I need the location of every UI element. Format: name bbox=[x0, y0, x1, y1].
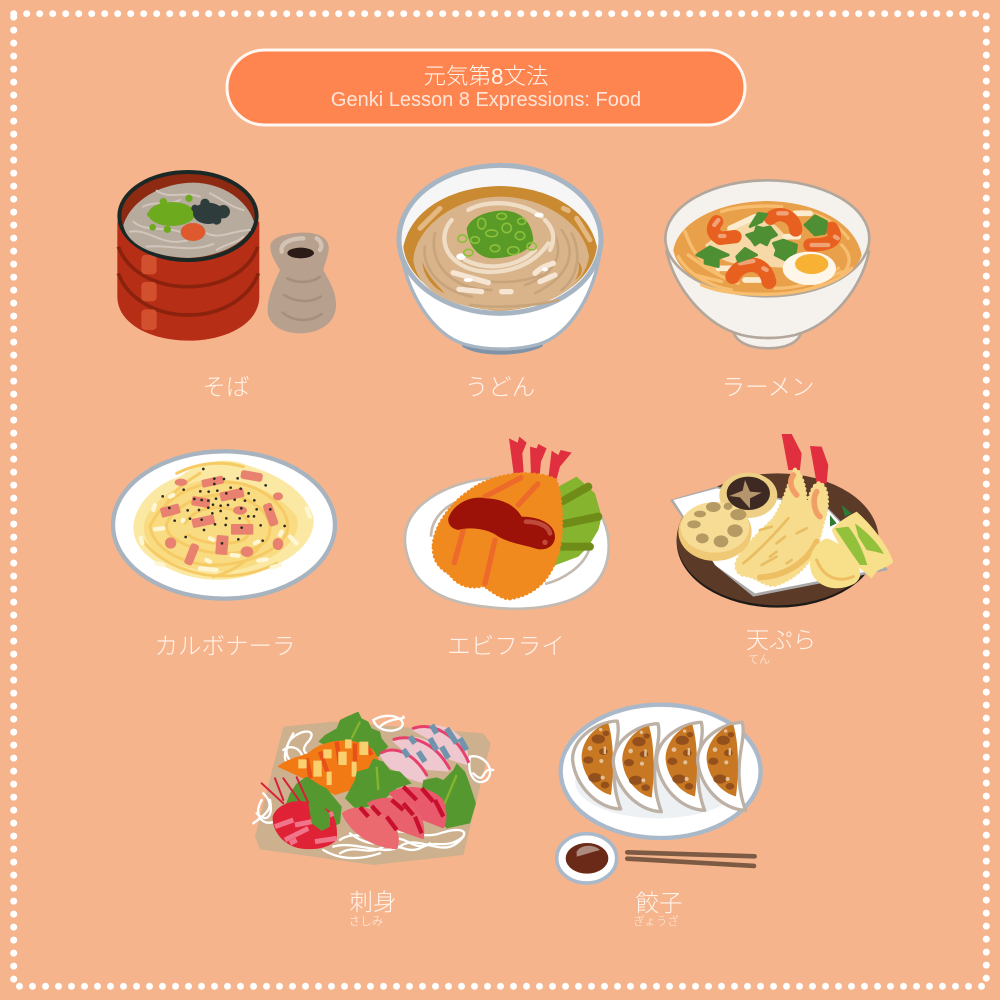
label: ebi fry: エビフライ bbox=[447, 633, 565, 659]
label: udon: うどん bbox=[465, 374, 535, 400]
pink fish slices bbox=[380, 749, 427, 783]
illustration: fried shrimp plate bbox=[405, 437, 609, 609]
fried batter bbox=[434, 475, 561, 598]
illustration: gyoza plate and sauce bbox=[557, 705, 761, 883]
label: carbonara: カルボナーラ bbox=[154, 633, 296, 659]
herb toppings bbox=[697, 213, 827, 267]
illustration: sashimi platter bbox=[253, 712, 493, 865]
nori mound bbox=[191, 199, 230, 225]
food item: ebi fry bbox=[405, 437, 609, 659]
chopsticks bbox=[627, 852, 755, 866]
label: ramen: ラーメン bbox=[721, 374, 815, 400]
label: gyoza: 餃子 bbox=[636, 890, 682, 916]
label: soba: そば bbox=[202, 374, 250, 400]
illustration: udon bowl bbox=[399, 165, 601, 355]
label: sashimi: 刺身 bbox=[350, 889, 396, 915]
gyoza dumpling 1 bbox=[573, 721, 621, 809]
gyoza dumpling 2 bbox=[613, 724, 661, 812]
sauce dish bbox=[557, 834, 617, 883]
shrimp batter bbox=[737, 470, 827, 585]
illustration: tempura plate bbox=[670, 434, 893, 608]
salmon slices bbox=[277, 740, 380, 795]
label: tempura: 天ぷら bbox=[746, 627, 816, 653]
food item: gyoza bbox=[557, 705, 761, 928]
gyoza dumpling 3 bbox=[657, 722, 705, 810]
shredded daikon bbox=[253, 716, 493, 858]
furigana: gyoza: ぎょうざ bbox=[633, 914, 679, 928]
furigana: sashimi: さしみ bbox=[349, 915, 383, 928]
furigana: ten: てん bbox=[748, 653, 770, 666]
food item: sashimi bbox=[253, 712, 493, 928]
title banner bbox=[227, 50, 745, 125]
food item: udon bbox=[399, 165, 601, 400]
title banner: Genki Lesson 8 Expressions: Food bbox=[331, 89, 641, 111]
title banner: 元気第8文法 bbox=[423, 64, 549, 89]
shrimp toppings bbox=[713, 215, 834, 282]
shrimp bbox=[273, 801, 337, 849]
green onion mound bbox=[147, 195, 195, 233]
food item: carbonara bbox=[113, 451, 335, 659]
food item: ramen bbox=[665, 180, 869, 400]
illustration: soba bowl and sake flask bbox=[117, 172, 336, 341]
food item: tempura bbox=[670, 434, 893, 666]
tuna slices bbox=[388, 787, 446, 828]
illustration: carbonara plate bbox=[113, 451, 335, 599]
illustration: ramen bowl bbox=[665, 180, 869, 348]
gyoza dumpling 4 bbox=[698, 722, 746, 810]
food item: soba bbox=[117, 172, 336, 400]
